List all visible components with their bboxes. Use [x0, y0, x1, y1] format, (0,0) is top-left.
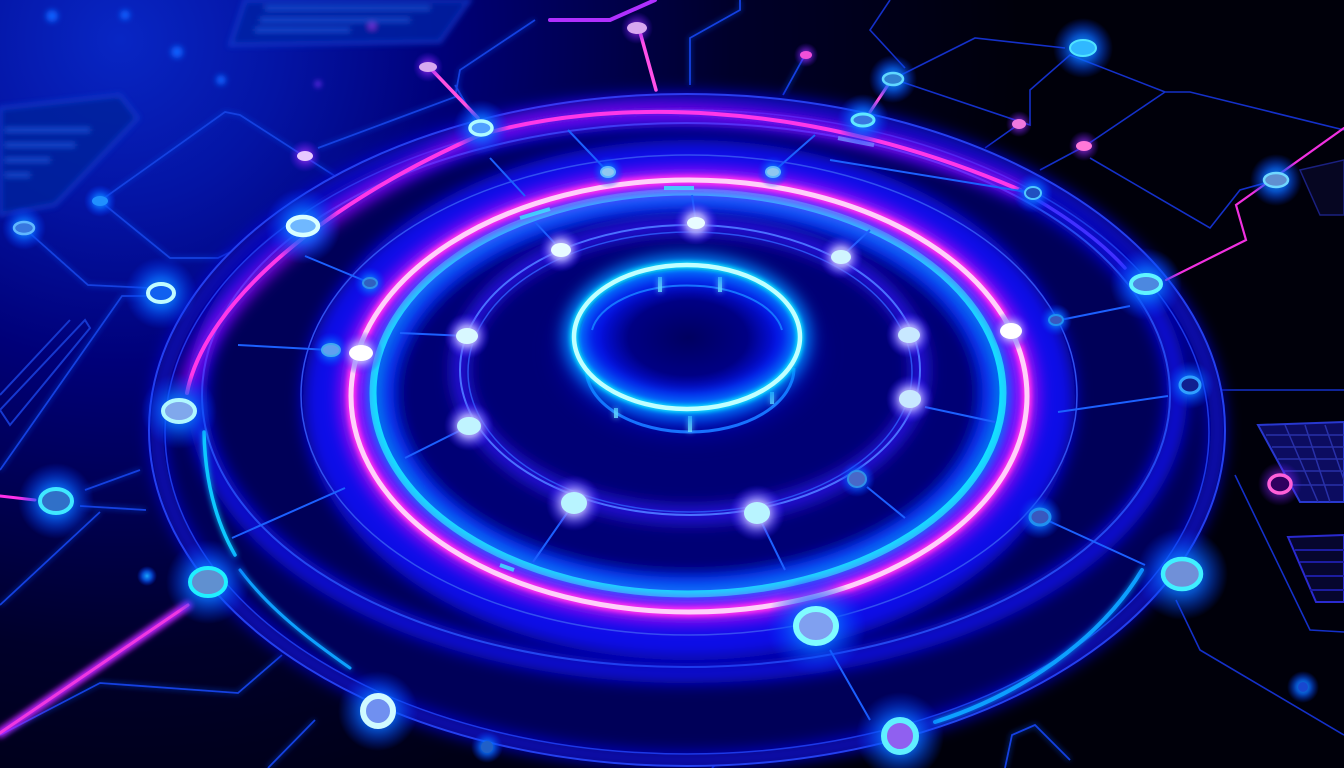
node: [886, 312, 932, 358]
center glowing ring: [574, 265, 800, 409]
node: [1136, 528, 1228, 620]
node: [819, 235, 863, 279]
icon: blurred background lights: [46, 10, 321, 87]
panel: left stripe block: [0, 320, 90, 425]
panel: top blurred circuit block: [230, 0, 470, 45]
node: [539, 228, 583, 272]
inner bright nodes: [339, 201, 1031, 541]
node: [1040, 304, 1072, 336]
node: [339, 331, 383, 375]
node: [166, 540, 250, 624]
node: [886, 375, 934, 423]
node: [856, 692, 944, 768]
panel: upper left blurred circuit block: [0, 95, 138, 215]
node: [444, 401, 494, 451]
node: [1166, 361, 1214, 409]
node: [766, 576, 866, 676]
node: [839, 461, 875, 497]
node: [991, 311, 1031, 351]
right side circuit traces: [870, 0, 1344, 735]
node: [621, 12, 653, 44]
icon: platform pegs: [616, 277, 772, 432]
outer cyan arcs: [204, 432, 1142, 722]
node: [1110, 248, 1182, 320]
node: [592, 156, 624, 188]
outer disc: [149, 94, 1225, 766]
node: [453, 100, 509, 156]
mid blue band: [301, 155, 1077, 636]
node: [137, 566, 157, 586]
node: [1053, 18, 1113, 78]
magenta main ring: [351, 180, 1027, 612]
node: [1250, 154, 1302, 206]
node: [338, 671, 418, 751]
magenta nodes: [289, 12, 1302, 506]
node: [1069, 131, 1099, 161]
node: [313, 332, 349, 368]
node: [141, 373, 217, 449]
ring accent dashes: [500, 138, 874, 570]
panel: right keypad and connector chips: [1258, 160, 1344, 602]
node: [125, 257, 197, 329]
node: [1287, 671, 1319, 703]
node: [289, 140, 321, 172]
outer magenta arc: [187, 112, 1125, 393]
node: [546, 475, 602, 531]
center ring platform: [542, 254, 834, 450]
circuit traces: [0, 0, 1070, 768]
node: [354, 267, 386, 299]
node: [837, 94, 889, 146]
disc spokes: [232, 130, 1168, 720]
node: [757, 156, 789, 188]
node: [1258, 462, 1302, 506]
node: [794, 43, 818, 67]
node: [1006, 111, 1032, 137]
node: [265, 188, 341, 264]
cyan ring: [373, 192, 1003, 594]
node: [18, 463, 94, 539]
inner thin ring: [460, 225, 920, 515]
node: [444, 313, 490, 359]
node: [2, 206, 46, 250]
node: [729, 485, 785, 541]
node: [1013, 173, 1053, 213]
node: [674, 201, 718, 245]
node: [84, 185, 116, 217]
node: [869, 55, 917, 103]
node: [471, 731, 503, 763]
node: [1018, 495, 1062, 539]
node: [413, 52, 443, 82]
